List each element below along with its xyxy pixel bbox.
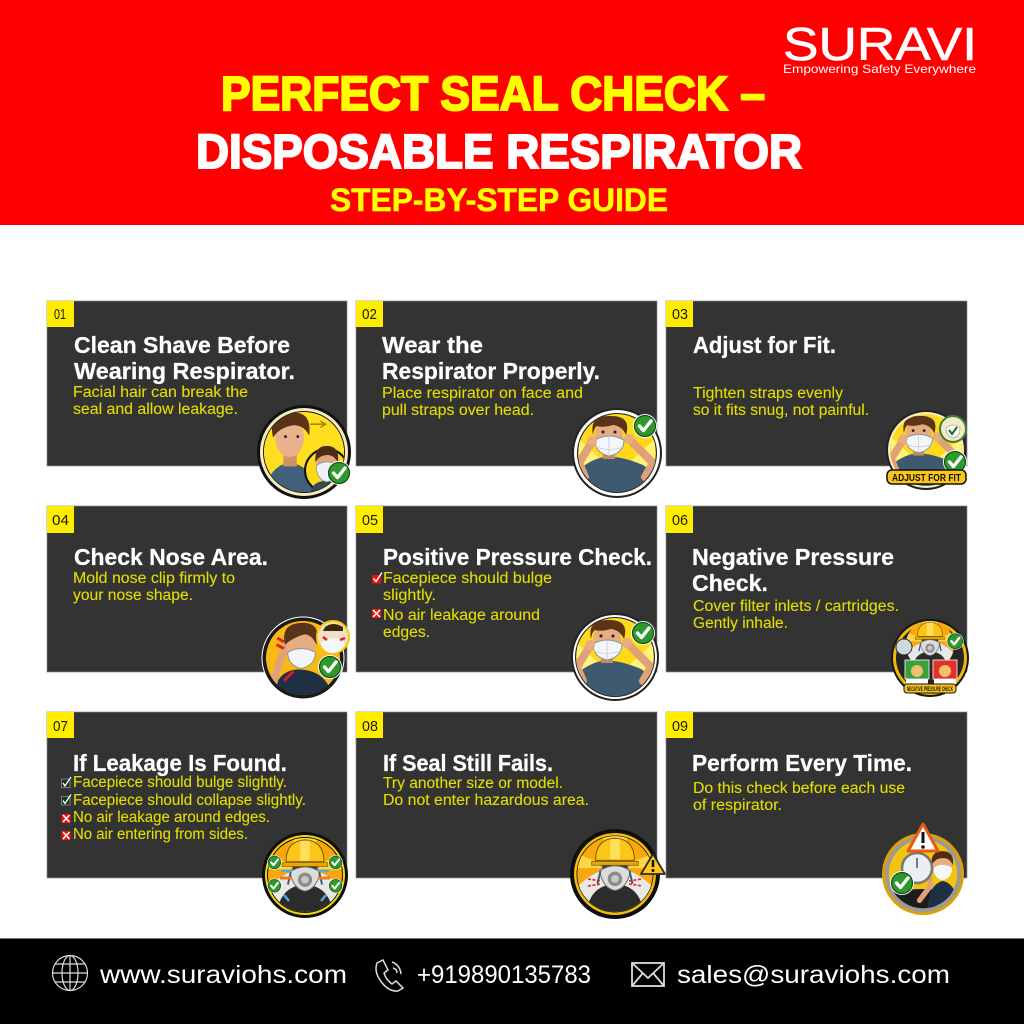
icon: phone <box>376 960 403 991</box>
panel: step 06: Negative Pressure <box>692 544 894 570</box>
panel: step 01 <box>47 301 351 499</box>
panel: step 09: Do this check before each use <box>693 780 905 797</box>
panel: step 05: Facepiece should bulge <box>383 570 552 587</box>
panel: step 06: Gently inhale. <box>693 615 788 632</box>
icon: wearing respirator badge <box>572 408 662 498</box>
icon: leak check badge <box>262 832 348 918</box>
panel: step 08 <box>356 712 665 919</box>
panel: step 01: Wearing Respirator. <box>74 358 295 384</box>
panel: step 06: Check. <box>692 570 768 596</box>
icon: negative pressure badge <box>891 619 969 697</box>
panel: step 08: Try another size or model. <box>383 775 563 792</box>
panel: step 01: Clean Shave Before <box>74 332 290 358</box>
icon: red cross box <box>372 609 381 618</box>
panel: step 07: Facepiece should bulge slightly. <box>73 774 287 791</box>
panel: step 05 <box>356 506 659 701</box>
panel: step 04 <box>47 506 349 700</box>
panel: step 09 <box>666 712 967 915</box>
title: STEP-BY-STEP GUIDE <box>330 182 668 218</box>
panel: step 01: Facial hair can break the <box>73 384 248 401</box>
panel: step 02: Wear the <box>382 332 483 358</box>
panel: step 06 <box>666 506 969 697</box>
phone number: +919890135783 <box>417 961 591 989</box>
logo: Suravi: SURAVI <box>783 18 977 70</box>
icon: negative pressure badge: NEGATIVE PRESSURE CHECK <box>907 686 953 693</box>
panel: step 05: 05 <box>362 512 378 529</box>
panel: step 03: Tighten straps evenly <box>693 385 843 402</box>
icon: adjust for fit badge <box>886 410 967 490</box>
panel: step 07: If Leakage Is Found. <box>73 750 287 776</box>
logo: Suravi: Empowering Safety Everywhere <box>783 62 976 76</box>
panel: step 03: Adjust for Fit. <box>693 332 836 358</box>
panel: step 02: Respirator Properly. <box>382 358 600 384</box>
panel: step 01: seal and allow leakage. <box>73 401 238 418</box>
icon: clean shave badge <box>257 405 351 499</box>
panel: step 06: Cover filter inlets / cartridges. <box>693 598 899 615</box>
icon: envelope <box>632 963 664 986</box>
panel: step 06: 06 <box>672 512 688 529</box>
panel: step 03: so it fits snug, not painful. <box>693 402 869 419</box>
email: sales@suraviohs.com <box>677 961 950 989</box>
panel: step 03: 03 <box>672 306 688 323</box>
panel: step 05: slightly. <box>383 587 436 604</box>
icon: nose clip badge <box>262 617 349 700</box>
panel: step 07: No air entering from sides. <box>73 826 248 843</box>
panel: step 08: 08 <box>362 718 378 735</box>
panel: step 01: 01 <box>54 306 66 323</box>
panel: step 09: Perform Every Time. <box>692 750 912 776</box>
panel: step 05: edges. <box>383 624 430 641</box>
website: www.suraviohs.com <box>99 961 347 989</box>
panel: step 09: of respirator. <box>693 797 782 814</box>
panel: step 04: Check Nose Area. <box>74 544 268 570</box>
icon: green check boxes <box>62 777 71 805</box>
panel: step 04: your nose shape. <box>73 587 193 604</box>
header band <box>0 0 1024 225</box>
panel: step 05: No air leakage around <box>383 607 540 624</box>
panel: step 02 <box>356 301 662 498</box>
title: DISPOSABLE RESPIRATOR <box>196 126 802 179</box>
panel: step 03 <box>666 301 967 490</box>
title <box>196 68 802 218</box>
panel: step 09: 09 <box>672 718 688 735</box>
icon: every-time badge <box>882 824 964 915</box>
panel: step 05: Positive Pressure Check. <box>383 544 652 570</box>
icon: seal failure badge <box>570 829 665 919</box>
icon: globe <box>52 956 88 990</box>
title: PERFECT SEAL CHECK – <box>221 68 765 121</box>
panel: step 04: 04 <box>52 512 69 529</box>
panel: step 07: No air leakage around edges. <box>73 809 270 826</box>
panel: step 07 <box>47 712 348 918</box>
icon: red check box <box>372 572 382 584</box>
panel: step 02: pull straps over head. <box>382 402 534 419</box>
panel: step 04: Mold nose clip firmly to <box>73 570 235 587</box>
panel: step 07: 07 <box>53 718 68 735</box>
panel: step 07: Facepiece should collapse slightly. <box>73 792 306 809</box>
icon: red cross boxes <box>62 814 70 840</box>
panel: step 02: Place respirator on face and <box>382 385 583 402</box>
panel: step 08: If Seal Still Fails. <box>383 750 553 776</box>
icon: adjust for fit badge: ADJUST FOR FIT <box>892 473 961 484</box>
panel: step 02: 02 <box>362 306 377 323</box>
footer band <box>0 938 1024 1024</box>
panel: step 08: Do not enter hazardous area. <box>383 792 589 809</box>
icon: positive pressure badge <box>571 613 659 701</box>
